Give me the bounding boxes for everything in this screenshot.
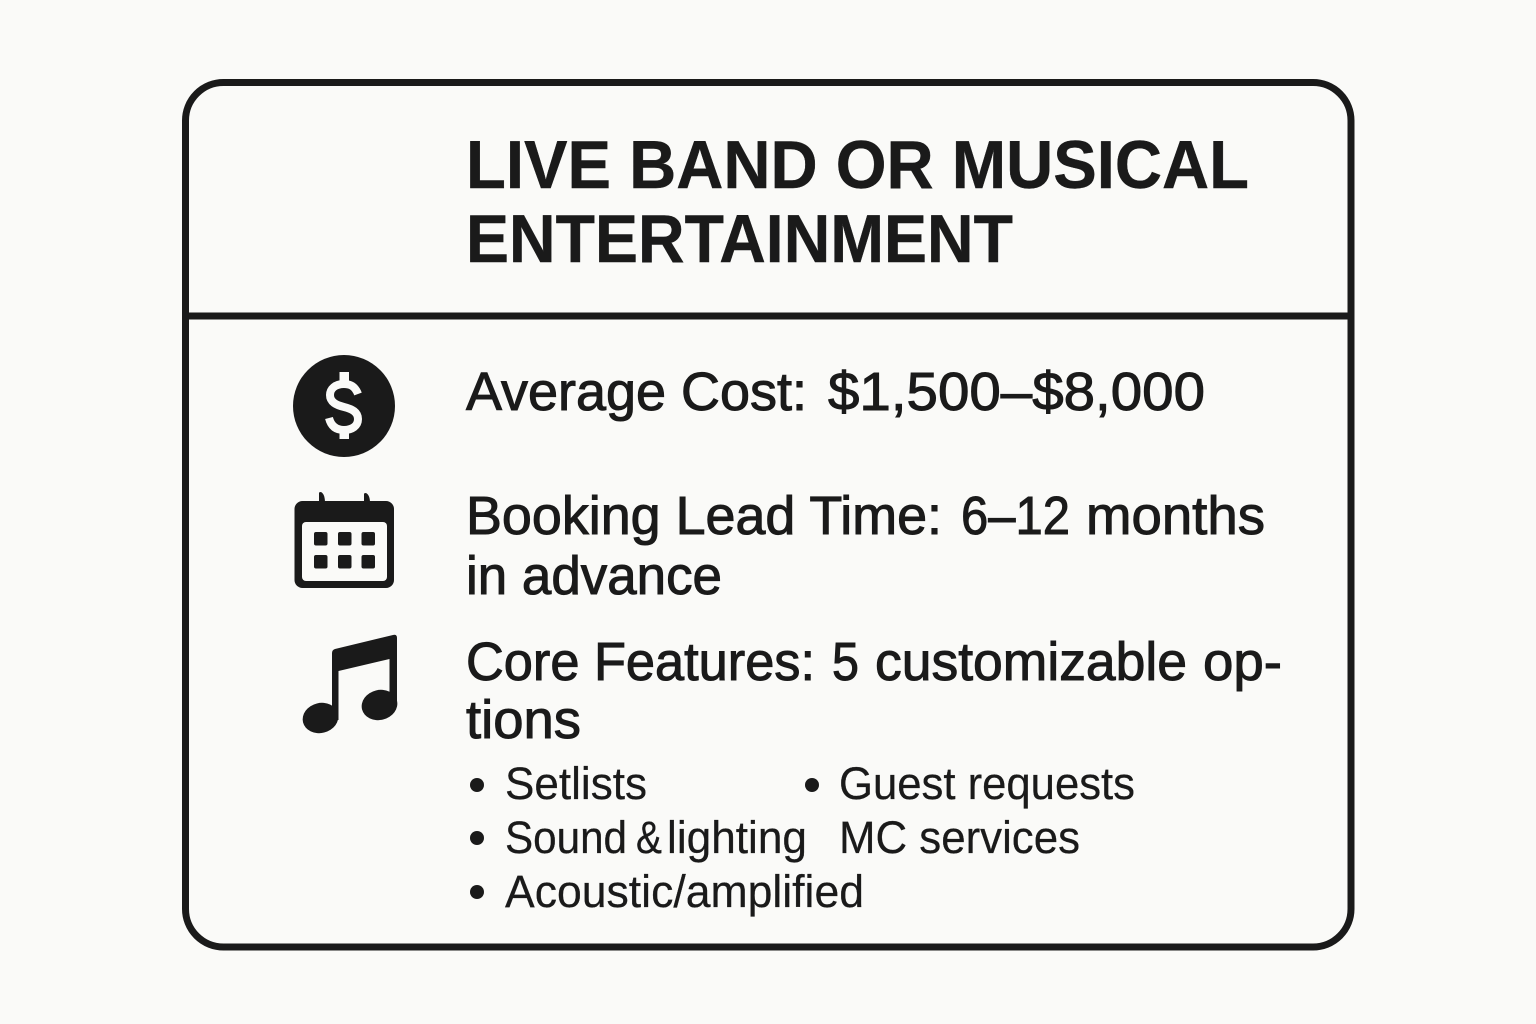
text: average cost: $1,500–$8,000 xyxy=(828,362,1205,422)
feature list: Guest requests xyxy=(839,758,1135,809)
title xyxy=(466,127,1249,277)
text: booking lead time: months xyxy=(1086,486,1265,546)
text: booking lead time xyxy=(466,486,1265,606)
feature list: MC services xyxy=(839,812,1080,863)
icon: dollar coin xyxy=(293,355,395,457)
title: ENTERTAINMENT xyxy=(466,201,1013,277)
feature list: lighting xyxy=(667,812,807,863)
feature list: & xyxy=(636,812,662,863)
feature list: Acoustic/amplified xyxy=(505,866,864,917)
icon: music note xyxy=(299,635,401,737)
feature list xyxy=(470,758,1135,917)
text: core features: Core Features: xyxy=(466,632,815,692)
text: average cost xyxy=(466,362,1205,422)
text: booking lead time: 6–12 xyxy=(961,486,1070,546)
text: booking lead time: Booking Lead Time: xyxy=(466,486,942,546)
feature list: Sound xyxy=(505,812,627,863)
feature list: Setlists xyxy=(505,758,647,809)
text: core features xyxy=(466,632,1282,750)
title: LIVE BAND OR MUSICAL xyxy=(466,127,1249,203)
panel: card outline xyxy=(186,82,1351,947)
text: core features: customizable xyxy=(875,632,1187,692)
text: core features: tions xyxy=(466,690,581,750)
text: core features: 5 xyxy=(832,632,859,692)
text: average cost: Average Cost: xyxy=(466,362,807,422)
icon: calendar xyxy=(294,492,394,588)
text: core features: op- xyxy=(1203,632,1282,692)
text: booking lead time: in advance xyxy=(466,546,722,606)
